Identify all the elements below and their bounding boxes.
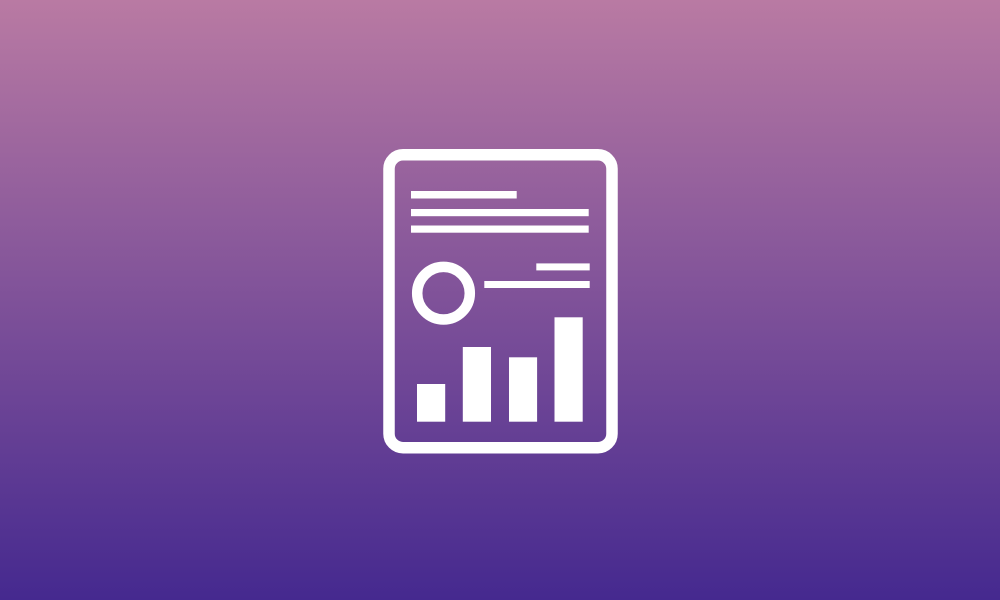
donut caption lines [484,263,590,288]
document outline [389,155,612,448]
donut chart [417,267,470,320]
text lines [411,191,589,233]
bar chart [417,317,583,422]
